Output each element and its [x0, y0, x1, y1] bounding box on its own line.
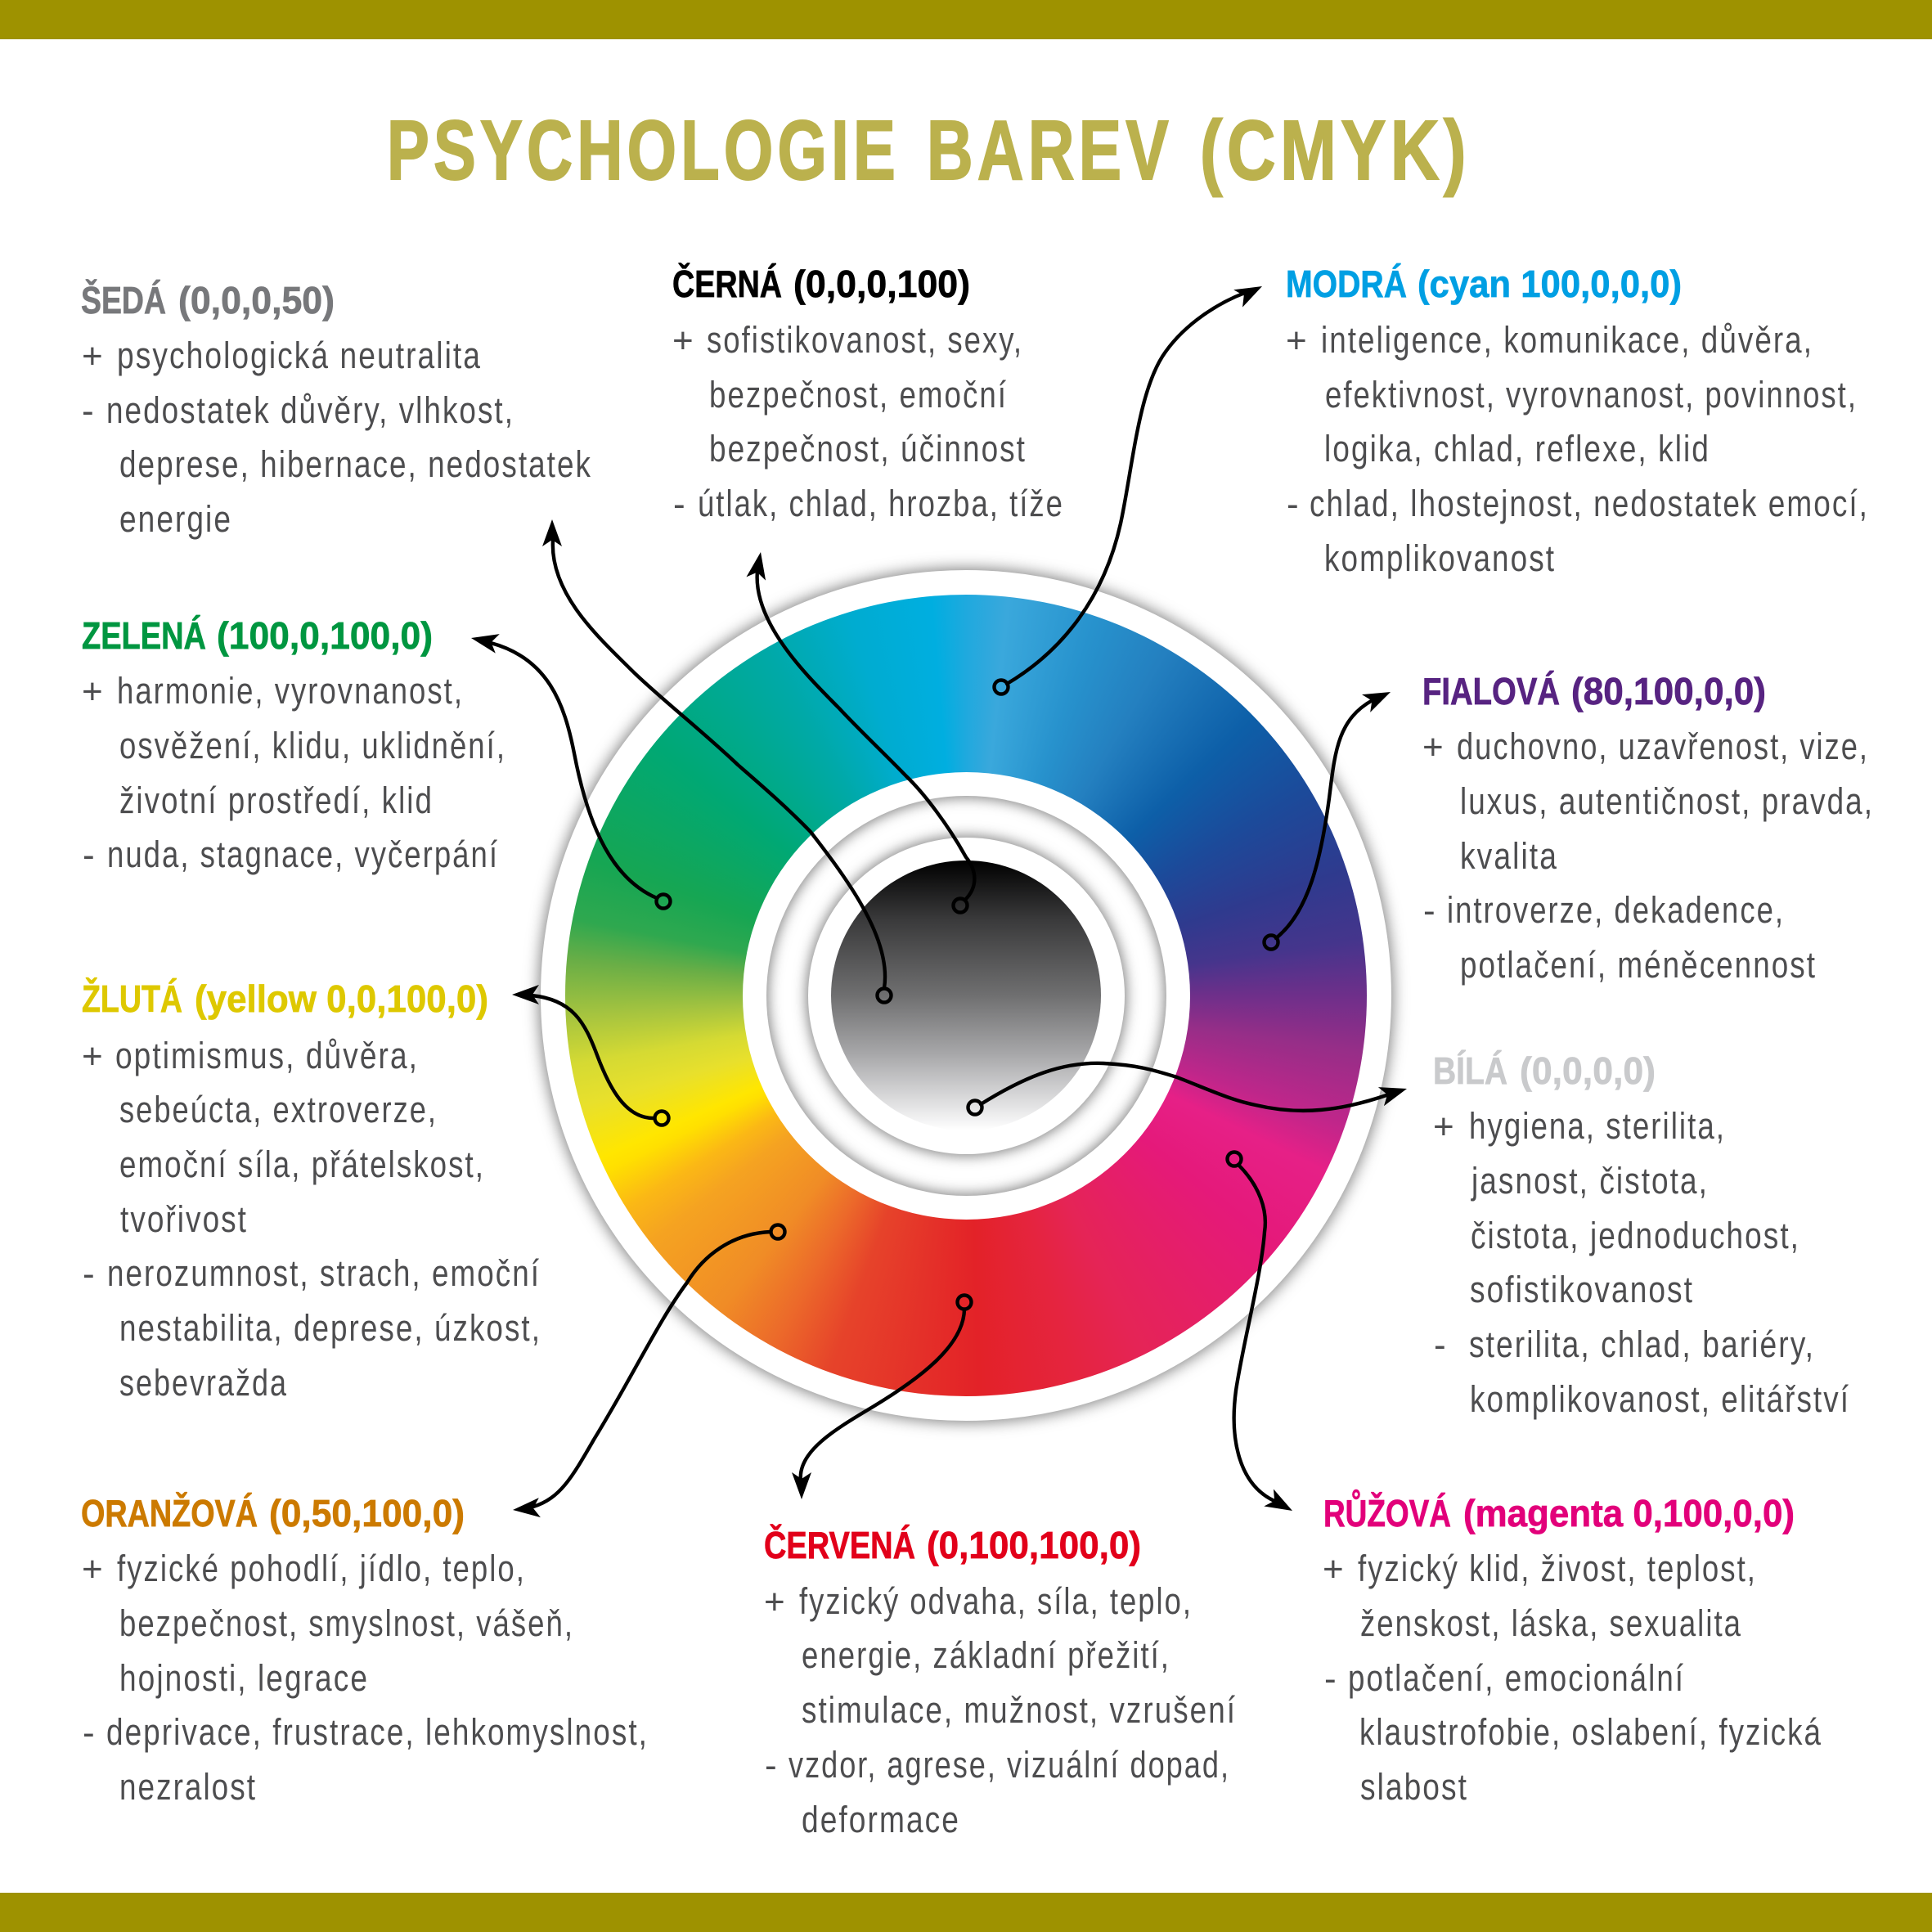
text: bílá attributes: jasnost, čistota,	[1470, 1160, 1709, 1202]
text: zelená attributes	[82, 670, 506, 875]
title: (CMYK)	[1200, 103, 1471, 197]
text: červená attributes: deformace	[802, 1799, 960, 1840]
text: modrá attributes: inteligence, komunikace, důvěra,	[1321, 319, 1813, 361]
text: bílá attributes: +	[1433, 1107, 1454, 1147]
text: fialová attributes	[1422, 726, 1874, 986]
panel: šedá	[81, 279, 592, 540]
text: fialová attributes: kvalita	[1460, 835, 1558, 877]
text: červená attributes: -	[765, 1746, 777, 1786]
text: šedá attributes: deprese, hibernace, nedostatek	[119, 443, 592, 485]
text: černá attributes	[672, 319, 1064, 524]
text: černá attributes: sofistikovanost, sexy,	[707, 319, 1023, 361]
heading: šedá: ŠEDÁ	[81, 279, 166, 321]
text: žlutá attributes: nerozumnost, strach, emoční	[107, 1252, 541, 1294]
title	[387, 103, 1471, 197]
heading: červená: (0,100,100,0)	[927, 1524, 1141, 1566]
text: modrá attributes: +	[1286, 321, 1307, 361]
text: modrá attributes: komplikovanost	[1324, 537, 1556, 579]
heading: oranžová: ORANŽOVÁ	[81, 1492, 258, 1534]
text: černá attributes: bezpečnost, účinnost	[709, 428, 1027, 470]
panel: růžová	[1323, 1489, 1822, 1808]
heading: fialová	[1422, 670, 1766, 712]
arrow: žlutá	[512, 985, 669, 1126]
text: žlutá attributes: nestabilita, deprese, úzkost,	[119, 1307, 541, 1349]
top band	[0, 0, 1932, 39]
text: šedá attributes: nedostatek důvěry, vlhkost,	[106, 389, 514, 431]
text: bílá attributes: komplikovanost, elitářství	[1470, 1378, 1850, 1420]
heading: zelená: (100,0,100,0)	[217, 614, 433, 657]
text: červená attributes: fyzický odvaha, síla, teplo,	[799, 1580, 1193, 1622]
text: zelená attributes: osvěžení, klidu, uklidnění,	[119, 725, 506, 766]
text: zelená attributes: životní prostředí, klid	[119, 780, 434, 821]
text: bílá attributes	[1433, 1105, 1850, 1420]
text: růžová attributes: ženskost, láska, sexualita	[1360, 1602, 1742, 1644]
text: šedá attributes: +	[82, 336, 103, 376]
arrow: šedá	[542, 519, 892, 1003]
text: černá attributes: -	[673, 484, 685, 524]
text: oranžová attributes: hojnosti, legrace	[119, 1657, 369, 1699]
text: šedá attributes: psychologická neutralita	[117, 335, 482, 376]
text: růžová attributes: fyzický klid, živost, teplost,	[1358, 1548, 1757, 1589]
heading: šedá: (0,0,0,50)	[178, 279, 335, 321]
arrow: červená	[792, 1296, 972, 1499]
text: fialová attributes: -	[1423, 891, 1436, 931]
title: PSYCHOLOGIE	[387, 103, 900, 197]
text: oranžová attributes: bezpečnost, smyslnost, vášeň,	[119, 1602, 574, 1644]
text: oranžová attributes: -	[83, 1713, 95, 1753]
panel: žlutá	[82, 977, 541, 1404]
text: bílá attributes: sterilita, chlad, bariéry,	[1469, 1323, 1815, 1365]
panel: červená	[764, 1524, 1237, 1840]
text: růžová attributes: potlačení, emocionální	[1348, 1657, 1685, 1699]
text: modrá attributes	[1286, 319, 1869, 579]
inner white disc	[808, 838, 1124, 1153]
text: červená attributes: vzdor, agrese, vizuální dopad,	[789, 1744, 1230, 1786]
recessed band	[766, 795, 1166, 1196]
text: modrá attributes: -	[1287, 484, 1299, 524]
text: černá attributes: útlak, chlad, hrozba, tíže	[698, 483, 1064, 524]
arrow: fialová	[1265, 683, 1395, 949]
heading: bílá	[1433, 1049, 1656, 1092]
text: šedá attributes	[82, 335, 592, 540]
heading: růžová: (magenta 0,100,0,0)	[1463, 1492, 1795, 1534]
heading: růžová	[1323, 1489, 1795, 1534]
heading: fialová: (80,100,0,0)	[1571, 670, 1766, 712]
heading: červená	[764, 1524, 1141, 1566]
arrow: bílá	[968, 1063, 1410, 1114]
text: zelená attributes: harmonie, vyrovnanost,	[117, 670, 464, 712]
outer white disc with shadow	[541, 570, 1391, 1421]
text: oranžová attributes: nezralost	[119, 1766, 257, 1808]
text: žlutá attributes: optimismus, důvěra,	[115, 1035, 419, 1076]
text: fialová attributes: +	[1422, 727, 1444, 767]
text: zelená attributes: -	[83, 835, 95, 875]
text: oranžová attributes: +	[82, 1549, 103, 1589]
text: žlutá attributes	[82, 1035, 541, 1404]
arrow: černá	[746, 550, 974, 913]
panel: fialová	[1422, 670, 1874, 986]
black to white gradient disc	[831, 860, 1101, 1130]
text: fialová attributes: potlačení, méněcennost	[1460, 944, 1817, 986]
text: červená attributes: energie, základní přežití,	[802, 1634, 1170, 1676]
heading: oranžová	[81, 1492, 465, 1534]
heading: žlutá	[82, 977, 488, 1020]
text: oranžová attributes: fyzické pohodlí, jídlo, teplo,	[117, 1548, 526, 1589]
text: bílá attributes: sofistikovanost	[1470, 1269, 1694, 1310]
conic colour ring	[565, 595, 1367, 1396]
text: černá attributes: +	[672, 321, 694, 361]
colour wheel	[528, 558, 1404, 1433]
heading: žlutá: (yellow 0,0,100,0)	[195, 977, 488, 1020]
text: žlutá attributes: sebeúcta, extroverze,	[119, 1089, 438, 1130]
heading: růžová: RŮŽOVÁ	[1323, 1489, 1451, 1534]
heading: modrá	[1286, 263, 1682, 305]
text: žlutá attributes: emoční síla, přátelskost,	[119, 1143, 485, 1185]
text: černá attributes: bezpečnost, emoční	[709, 374, 1008, 416]
text: žlutá attributes: tvořivost	[120, 1198, 248, 1240]
text: oranžová attributes: deprivace, frustrace, lehkomyslnost,	[106, 1711, 649, 1753]
text: šedá attributes: energie	[119, 498, 232, 540]
heading: zelená: ZELENÁ	[82, 614, 206, 657]
title: BAREV	[927, 103, 1173, 197]
arrow: modrá	[995, 277, 1266, 694]
text: žlutá attributes: -	[83, 1254, 95, 1294]
text: růžová attributes: -	[1324, 1659, 1337, 1699]
text: červená attributes	[764, 1580, 1237, 1840]
text: červená attributes: stimulace, mužnost, vzrušení	[802, 1689, 1237, 1731]
heading: bílá: BÍLÁ	[1433, 1049, 1507, 1092]
text: modrá attributes: logika, chlad, reflexe, klid	[1324, 428, 1710, 470]
panel: oranžová	[81, 1492, 649, 1808]
heading: černá: ČERNÁ	[672, 263, 782, 305]
heading: zelená	[82, 614, 433, 657]
text: bílá attributes: -	[1434, 1325, 1446, 1365]
arrow: oranžová	[512, 1225, 785, 1520]
heading: černá: (0,0,0,100)	[793, 263, 970, 305]
arrow: růžová	[1227, 1152, 1297, 1519]
heading: modrá: MODRÁ	[1286, 263, 1407, 305]
text: růžová attributes: +	[1323, 1549, 1344, 1589]
text: žlutá attributes: +	[82, 1036, 103, 1076]
arrow: zelená	[470, 628, 671, 908]
text: červená attributes: +	[764, 1582, 785, 1622]
text: žlutá attributes: sebevražda	[119, 1362, 288, 1404]
bottom band	[0, 1893, 1932, 1932]
heading: modrá: (cyan 100,0,0,0)	[1418, 263, 1682, 305]
panel: modrá	[1286, 263, 1869, 579]
text: šedá attributes: -	[82, 391, 94, 431]
text: bílá attributes: hygiena, sterilita,	[1469, 1105, 1726, 1147]
text: růžová attributes	[1323, 1548, 1822, 1808]
text: zelená attributes: nuda, stagnace, vyčerpání	[107, 833, 499, 875]
heading: červená: ČERVENÁ	[764, 1524, 915, 1566]
heading: bílá: (0,0,0,0)	[1520, 1049, 1656, 1092]
inner white ring	[743, 772, 1189, 1219]
heading: fialová: FIALOVÁ	[1422, 670, 1560, 712]
text: zelená attributes: +	[82, 672, 103, 712]
text: bílá attributes: čistota, jednoduchost,	[1471, 1215, 1800, 1256]
heading: černá	[672, 263, 970, 305]
text: fialová attributes: introverze, dekadence,	[1447, 889, 1785, 931]
heading: žlutá: ŽLUTÁ	[82, 977, 182, 1020]
heading: oranžová: (0,50,100,0)	[269, 1492, 465, 1534]
heading: šedá	[81, 279, 335, 321]
panel: bílá	[1433, 1049, 1850, 1420]
text: růžová attributes: slabost	[1360, 1766, 1468, 1808]
text: oranžová attributes	[82, 1548, 649, 1808]
panel: zelená	[82, 614, 506, 875]
text: růžová attributes: klaustrofobie, oslabení, fyzická	[1359, 1711, 1822, 1753]
panel: černá	[672, 263, 1064, 524]
